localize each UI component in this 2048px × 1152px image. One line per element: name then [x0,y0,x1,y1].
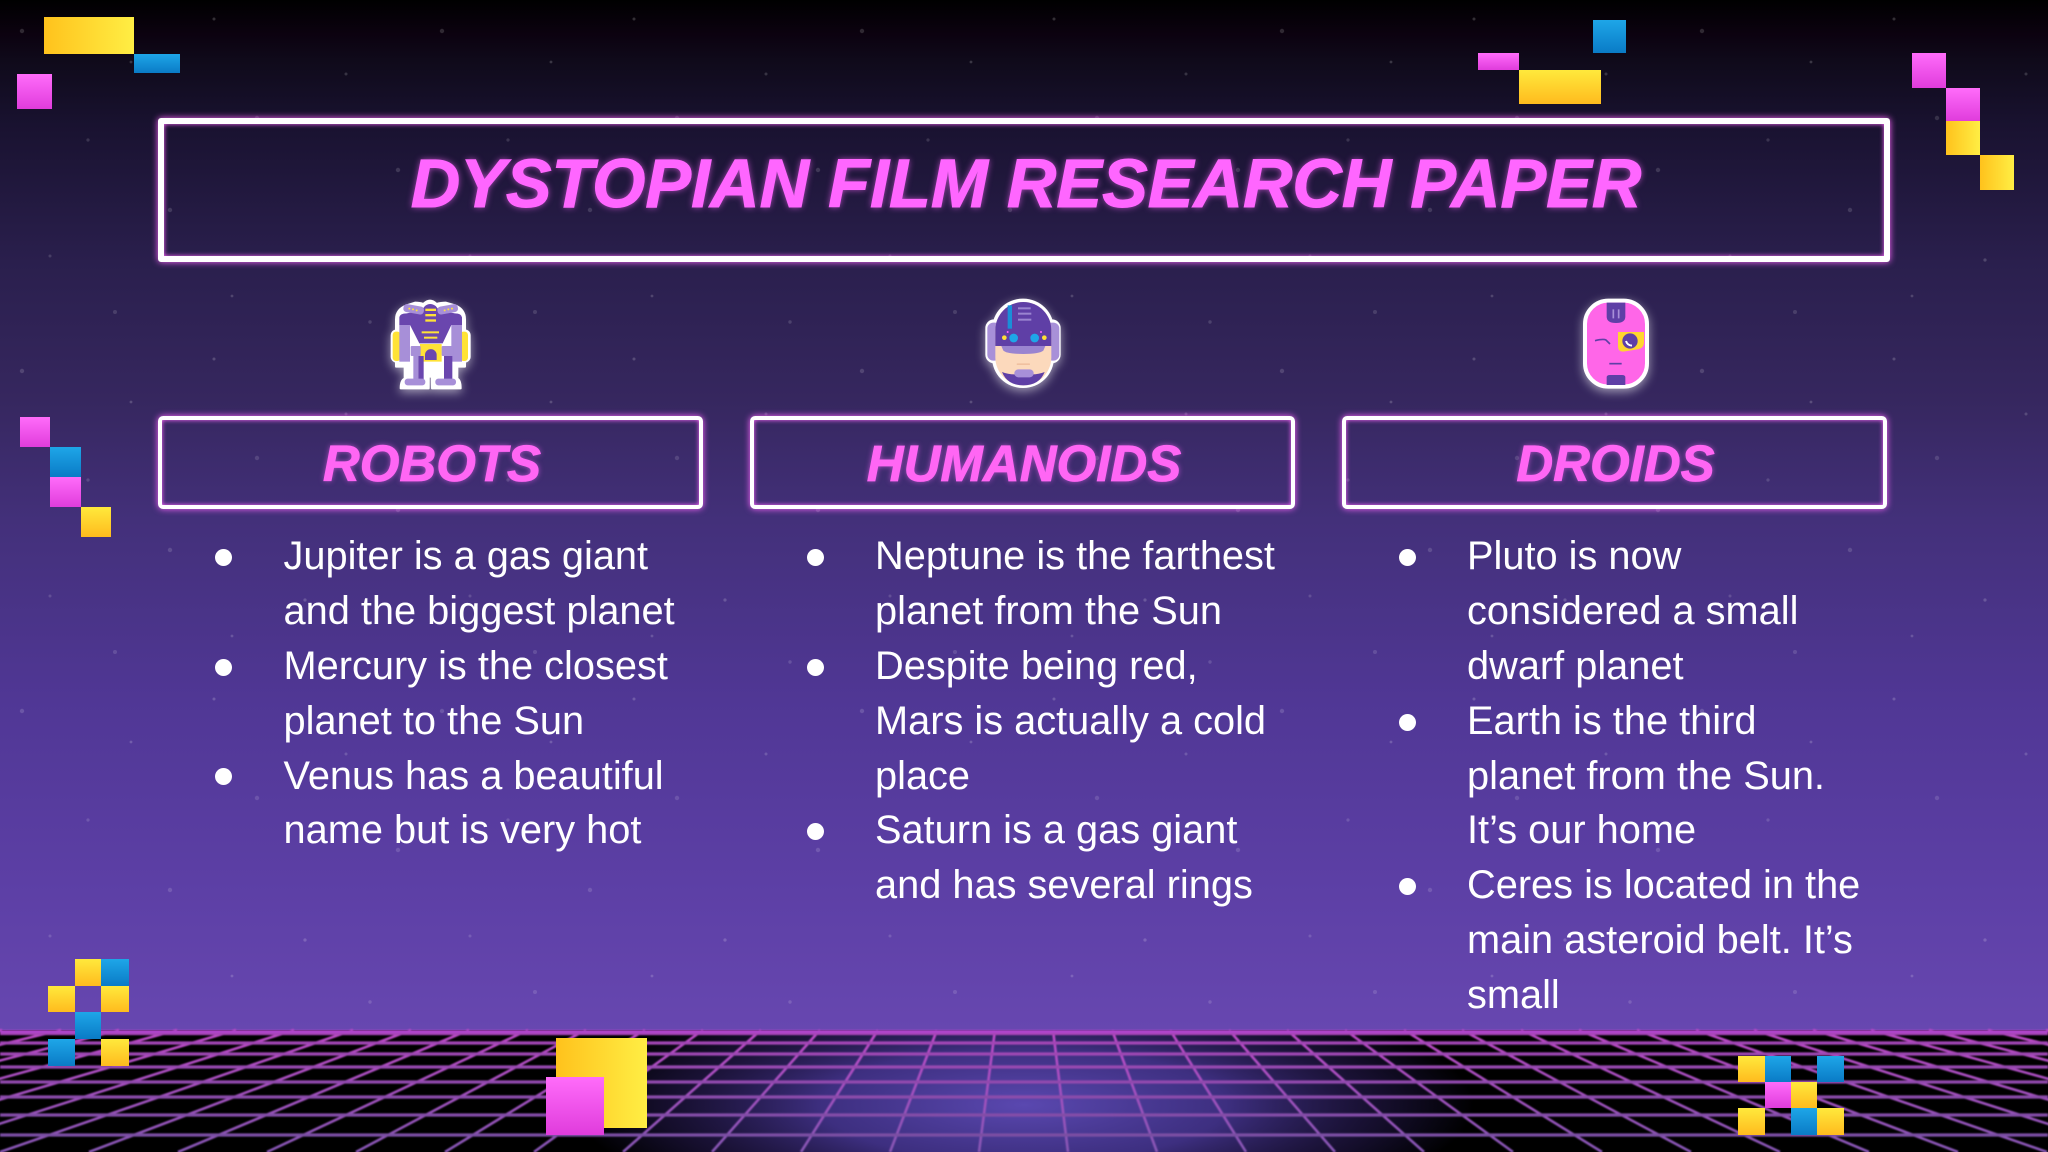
bullet list: robots: Jupiter is a gas giant [284,534,648,578]
decoration: bottom-left pixel cluster [48,959,129,1066]
bullet list: robots [215,534,675,852]
bullet list: droids: dwarf planet [1467,644,1684,688]
heading: droids: DROIDS [1516,435,1715,492]
icon: droid [1576,294,1656,398]
bullet list: humanoids: Neptune is the farthest [875,534,1275,578]
bullet list: humanoids: and has several rings [875,863,1253,907]
bullet list: humanoids: Despite being red, [875,644,1198,688]
decoration: top-right pixel staircase [1912,53,2014,190]
heading: robots: ROBOTS [323,435,541,492]
decoration: top-left pixel blocks [17,17,180,109]
heading box: droids [1342,416,1887,509]
bullet list: droids [1399,534,1860,1017]
heading: humanoids: HUMANOIDS [867,435,1181,492]
bullet list: droids: It’s our home [1467,808,1696,852]
bullet list: robots: planet to the Sun [284,699,584,743]
icon: robot [384,296,478,400]
bullet list: robots: and the biggest planet [284,589,675,633]
decoration: bottom-right pixel cluster [1738,1056,1844,1135]
bullet list: droids: planet from the Sun. [1467,754,1825,798]
decoration: top-centre-right pixel blocks [1478,20,1626,104]
bullet list: humanoids: place [875,754,970,798]
bullet list: robots: Venus has a beautiful [284,754,664,798]
bullet list: droids: Earth is the third [1467,699,1756,743]
bullet list: humanoids: Mars is actually a cold [875,699,1266,743]
bullet list: humanoids: planet from the Sun [875,589,1222,633]
title: DYSTOPIAN FILM RESEARCH PAPER [411,145,1641,222]
bullet list: robots: Mercury is the closest [284,644,668,688]
bullet list: robots: name but is very hot [284,808,641,852]
bullet list: droids: considered a small [1467,589,1798,633]
bullet list: droids: Ceres is located in the [1467,863,1860,907]
heading box: robots [158,416,703,509]
decoration: bottom-centre overlapping blocks [546,1038,647,1135]
bullet list: droids: small [1467,973,1560,1017]
heading box: humanoids [750,416,1295,509]
bullet list: humanoids: Saturn is a gas giant [875,808,1237,852]
title frame [158,118,1890,262]
icon: humanoid [978,295,1068,398]
bullet list: droids: Pluto is now [1467,534,1681,578]
decoration: left pixel staircase [20,417,111,537]
bullet list: droids: main asteroid belt. It’s [1467,918,1853,962]
bullet list: humanoids [807,534,1275,907]
